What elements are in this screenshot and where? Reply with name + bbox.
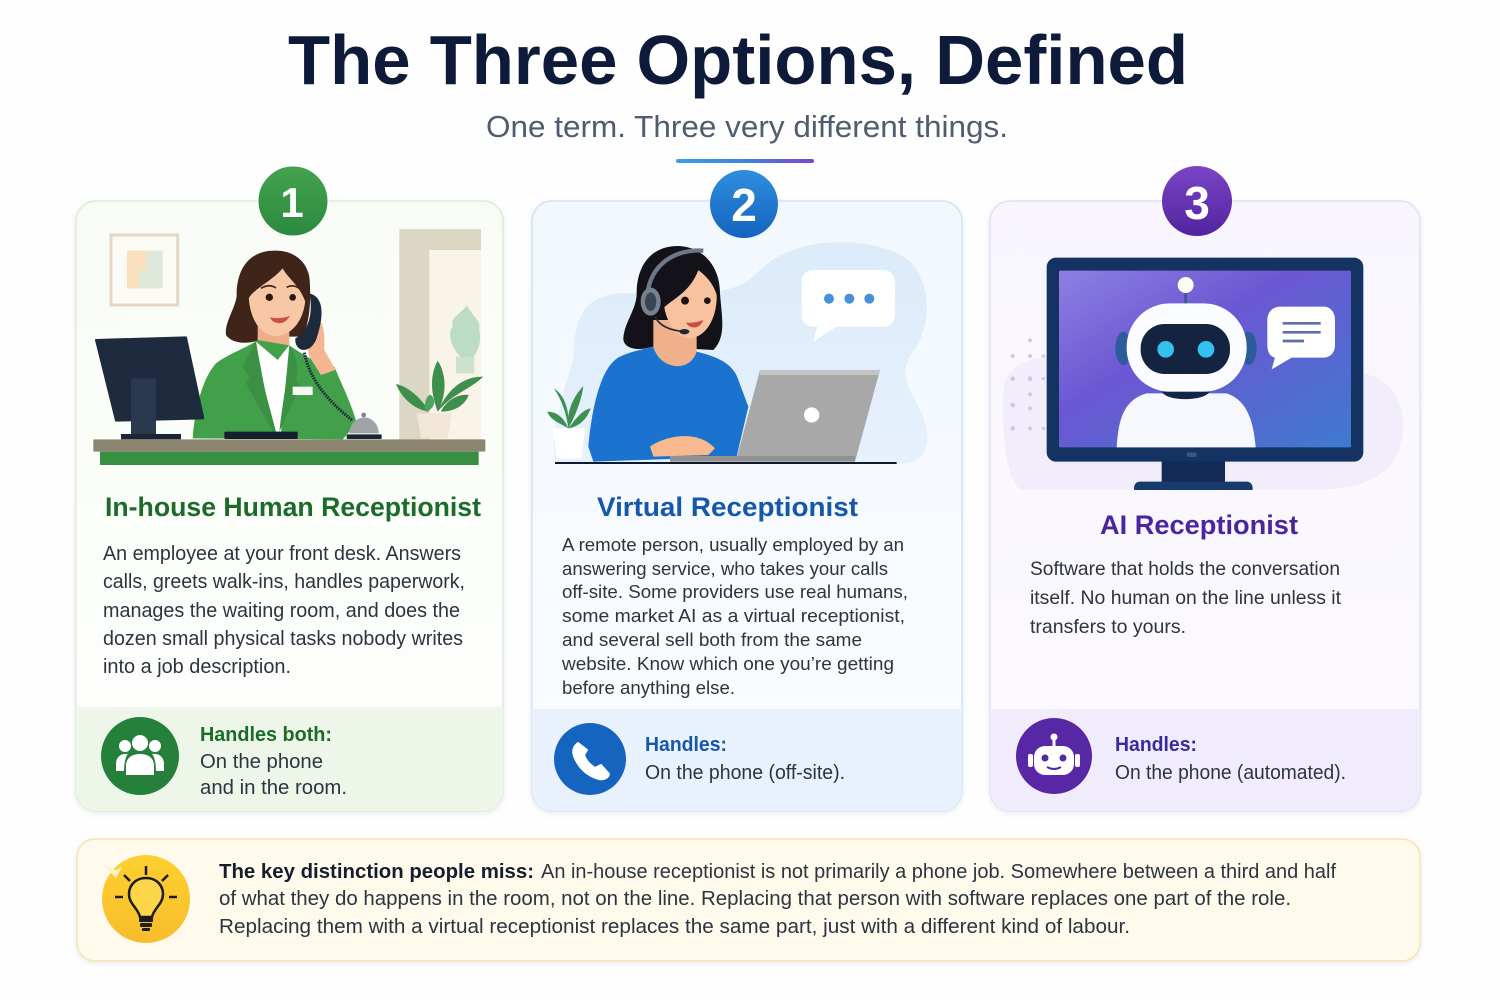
description: virtual: before anything else. [562, 677, 735, 698]
subtitle: One term. Three very different things. [486, 109, 1008, 144]
icon: robot head [1016, 718, 1092, 794]
number badge 3 [1162, 166, 1232, 236]
number badge 1 [258, 166, 328, 236]
number badge 1: 1 [280, 179, 304, 226]
panel: virtual receptionist [532, 170, 962, 811]
callout text: of what they do happens in the room, not on the line. Replacing that person with software replaces one part of the role. [219, 888, 1291, 910]
description: in-house [103, 543, 465, 678]
handles strip: virtual [532, 709, 962, 811]
panel: AI receptionist [990, 166, 1420, 811]
handles text: AI [1115, 734, 1346, 784]
illustration: remote agent with headset and laptop [547, 242, 927, 464]
heading: AI: AI Receptionist [1100, 510, 1298, 540]
number badge 2: 2 [731, 179, 757, 231]
handles text: in-house: On the phone [200, 751, 323, 773]
description: virtual: and several sell both from the same [562, 629, 862, 650]
number badge 2 [710, 170, 778, 238]
description: AI: transfers to yours. [1030, 616, 1186, 638]
handles text: in-house [200, 724, 347, 799]
handles text: AI: Handles: [1115, 734, 1197, 756]
illustration: robot on a monitor [1003, 258, 1403, 490]
description: virtual: some market AI as a virtual receptionist, [562, 605, 905, 626]
heading: in-house: In-house Human Receptionist [105, 492, 481, 522]
handles strip: AI [990, 709, 1420, 811]
icon: telephone handset [554, 723, 626, 795]
handles text: virtual [645, 734, 845, 784]
callout: key distinction [77, 839, 1420, 961]
description: virtual: A remote person, usually employed by an [562, 534, 904, 555]
handles text: virtual: On the phone (off-site). [645, 762, 845, 784]
description: virtual: answering service, who takes your calls [562, 558, 888, 579]
description: in-house: calls, greets walk-ins, handles paperwork, [103, 571, 465, 593]
description: in-house: An employee at your front desk. Answers [103, 543, 461, 565]
callout text: An in-house receptionist is not primarily a phone job. Somewhere between a third and half [541, 861, 1336, 883]
handles strip: in-house [76, 707, 503, 811]
description: virtual: off-site. Some providers use real humans, [562, 581, 908, 602]
panel: in-house human receptionist [76, 166, 503, 811]
illustration: receptionist at front desk [93, 229, 485, 465]
handles text: in-house: and in the room. [200, 777, 347, 799]
handles text: AI: On the phone (automated). [1115, 762, 1346, 784]
handles text: in-house: Handles both: [200, 724, 332, 746]
description: virtual: website. Know which one you’re getting [561, 653, 894, 674]
callout text [219, 861, 1336, 938]
callout text: Replacing them with a virtual receptionist replaces the same part, just with a different kind of labour. [219, 916, 1130, 938]
description: in-house: manages the waiting room, and does the [103, 600, 460, 622]
icon: light bulb [102, 855, 190, 943]
description: AI: Software that holds the conversation [1030, 558, 1340, 580]
description: AI [1030, 558, 1342, 638]
heading: virtual: Virtual Receptionist [597, 492, 858, 522]
description: AI: itself. No human on the line unless it [1030, 587, 1342, 609]
description: virtual [561, 534, 908, 698]
handles text: virtual: Handles: [645, 734, 727, 756]
description: in-house: dozen small physical tasks nobody writes [103, 628, 463, 650]
number badge 3: 3 [1184, 177, 1210, 229]
icon: group of people [101, 717, 179, 795]
title underline [676, 159, 814, 163]
description: in-house: into a job description. [103, 656, 291, 678]
title: The Three Options, Defined [288, 21, 1188, 99]
callout text: The key distinction people miss: [219, 861, 534, 883]
